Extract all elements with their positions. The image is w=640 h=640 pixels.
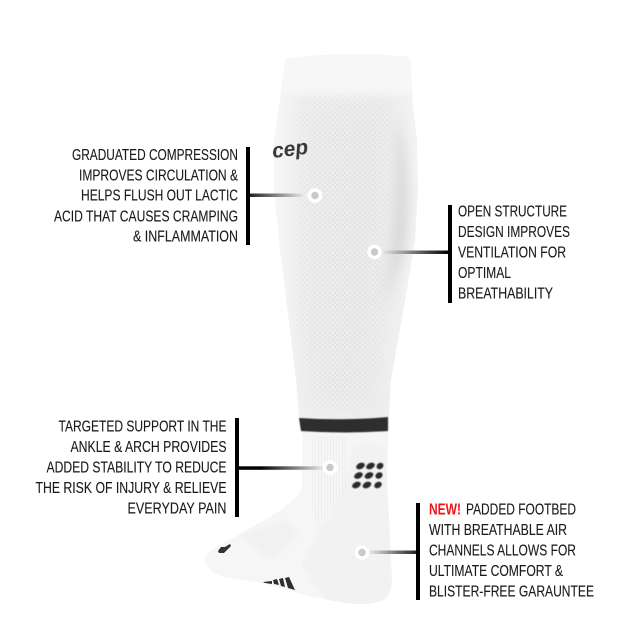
text block: padded footbed: ULTIMATE COMFORT & xyxy=(429,563,564,580)
text block: open structure: OPEN STRUCTURE xyxy=(458,204,567,220)
text block: targeted support: ANKLE & ARCH PROVIDES xyxy=(70,439,226,456)
text block: open structure: OPTIMAL xyxy=(458,265,511,282)
callout: padded footbed xyxy=(356,502,594,600)
text block: targeted support: TARGETED SUPPORT IN THE xyxy=(58,418,226,436)
text block: open structure: BREATHABILITY xyxy=(458,286,553,302)
sock body xyxy=(274,95,418,432)
text block: targeted support: EVERYDAY PAIN xyxy=(128,500,226,518)
text block: graduated compression: GRADUATED COMPRESSION xyxy=(72,147,238,164)
text block: graduated compression: HELPS FLUSH OUT LACTIC xyxy=(81,188,238,204)
sock product image xyxy=(206,54,418,604)
text block: targeted support: THE RISK OF INJURY & RELIEVE xyxy=(36,480,226,497)
text block: graduated compression: & INFLAMMATION xyxy=(133,228,238,246)
text block: open structure: DESIGN IMPROVES xyxy=(458,224,570,241)
text block: graduated compression: ACID THAT CAUSES CRAMPING xyxy=(54,208,238,226)
text block: padded footbed xyxy=(429,502,594,600)
text block: padded footbed: BLISTER-FREE GARAUNTEE xyxy=(429,584,594,600)
text block: padded footbed: PADDED FOOTBED xyxy=(466,502,576,518)
text block: targeted support: ADDED STABILITY TO REDUCE xyxy=(46,460,226,476)
ankle band xyxy=(299,417,388,432)
text block: padded footbed: WITH BREATHABLE AIR xyxy=(429,522,567,539)
callout: targeted support xyxy=(36,418,336,518)
logo dots on heel xyxy=(351,461,385,490)
text block: padded footbed: CHANNELS ALLOWS FOR xyxy=(429,542,576,560)
text block: graduated compression: IMPROVES CIRCULATION & xyxy=(79,168,239,184)
toe mark xyxy=(218,544,231,553)
text block: targeted support xyxy=(36,418,226,518)
logo: cep: cep xyxy=(271,136,310,163)
text block: open structure xyxy=(458,204,570,302)
callout: open structure xyxy=(369,204,570,303)
sole stripes xyxy=(263,577,295,590)
text block: open structure: VENTILATION FOR xyxy=(458,244,566,262)
callout: graduated compression xyxy=(54,147,320,246)
text block: padded footbed: NEW! xyxy=(429,502,461,518)
text block: graduated compression xyxy=(54,147,239,246)
